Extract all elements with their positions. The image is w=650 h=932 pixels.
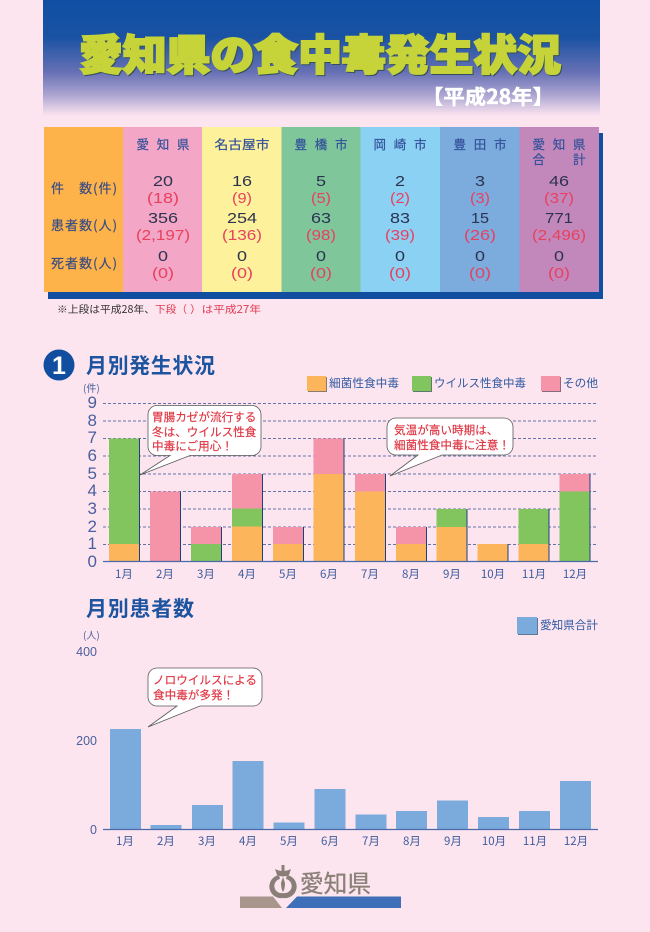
section number badge — [44, 350, 74, 380]
y axis labels: 3 — [88, 499, 97, 518]
table values: 63 — [311, 210, 331, 227]
table values: (3) — [470, 190, 490, 207]
month labels: 8月 — [402, 566, 420, 582]
month labels: 3月 — [198, 833, 216, 849]
title: 愛知県の食中毒発生状況 — [79, 22, 561, 83]
callout: norovirus: 食中毒が多発！ — [153, 687, 234, 703]
y axis labels: 0 — [90, 823, 97, 837]
header banner — [43, 0, 600, 116]
legend: outbreak types: その他 — [563, 375, 598, 391]
month labels: 10月 — [481, 566, 505, 582]
logo band — [240, 896, 401, 908]
month labels: 10月 — [482, 833, 506, 849]
column headers — [136, 134, 586, 168]
month labels: 7月 — [362, 833, 380, 849]
month labels: 2月 — [156, 566, 174, 582]
callout: winter stomach flu: 中毒にご用心！ — [152, 438, 233, 454]
table values: (5) — [311, 190, 331, 207]
table values: (2,197) — [136, 227, 190, 244]
legend: outbreak types — [307, 375, 598, 392]
table values: (0) — [231, 265, 253, 282]
row labels — [51, 178, 117, 272]
table values: 356 — [148, 210, 178, 227]
y axis labels: 2 — [88, 517, 97, 536]
table values: (136) — [222, 227, 262, 244]
table values: (98) — [306, 227, 336, 244]
month labels: 4月 — [238, 566, 256, 582]
y axis unit: (人) — [83, 627, 100, 642]
table values: (39) — [385, 227, 415, 244]
table footnote: ）は平成27年 — [190, 301, 261, 316]
icon: prefecture emblem — [269, 865, 297, 903]
month labels: 11月 — [523, 833, 547, 849]
table values: (26) — [464, 227, 496, 244]
month labels: 3月 — [197, 566, 215, 582]
callout: norovirus — [148, 668, 262, 727]
section heading: monthly outbreaks: 月別発生状況 — [86, 350, 215, 380]
table values: 5 — [316, 173, 326, 190]
y axis unit: (件) — [83, 380, 100, 395]
table values: 46 — [549, 173, 569, 190]
month labels: 6月 — [320, 566, 338, 582]
section number badge: 1 — [52, 352, 66, 380]
legend: outbreak types: 細菌性食中毒 — [329, 375, 399, 391]
column headers: 名古屋市 — [214, 134, 270, 153]
row labels: 件 数(件) — [51, 178, 117, 197]
month labels: 11月 — [522, 566, 546, 582]
table values: (0) — [310, 265, 332, 282]
month labels: 8月 — [403, 833, 421, 849]
table values: 16 — [232, 173, 252, 190]
table values: (9) — [232, 190, 252, 207]
summary table — [44, 127, 603, 299]
table values: 3 — [475, 173, 485, 190]
table values: (2) — [390, 190, 410, 207]
table values: 0 — [475, 248, 485, 265]
row labels: 患者数(人) — [51, 215, 117, 234]
table values — [136, 173, 586, 282]
table values: 83 — [390, 210, 410, 227]
footer logo: Aichi Prefecture — [240, 864, 401, 908]
month labels: 7月 — [361, 566, 379, 582]
callout: norovirus: ノロウイルスによる — [153, 672, 257, 688]
callout: hot season: 気温が高い時期は、 — [394, 422, 498, 438]
section heading: monthly patients: 月別患者数 — [86, 593, 194, 623]
table footnote: ※上段は平成28年、 — [57, 301, 155, 316]
callout: winter stomach flu — [140, 406, 261, 475]
bars — [110, 729, 591, 829]
row labels: 死者数(人) — [51, 253, 117, 272]
y axis labels: 9 — [88, 393, 97, 412]
y axis labels — [88, 393, 97, 571]
table values: 0 — [237, 248, 247, 265]
bar chart: monthly patients — [76, 627, 598, 849]
table values: (0) — [389, 265, 411, 282]
table values: 771 — [545, 210, 573, 227]
table values: (0) — [548, 265, 570, 282]
y axis labels: 0 — [88, 552, 97, 571]
month labels: 6月 — [321, 833, 339, 849]
legend: outbreak types: ウイルス性食中毒 — [434, 375, 526, 391]
table values: 0 — [316, 248, 326, 265]
table values: 0 — [554, 248, 564, 265]
month labels: 1月 — [115, 566, 133, 582]
y axis labels: 200 — [76, 734, 97, 748]
month labels: 9月 — [443, 566, 461, 582]
logo wordmark: 愛知県 — [300, 864, 371, 899]
x axis — [103, 560, 598, 562]
month labels: 2月 — [157, 833, 175, 849]
subtitle year: 【平成28年】 — [422, 81, 554, 110]
column headers: 愛 知 県 — [136, 134, 190, 153]
table values: 2 — [395, 173, 405, 190]
month labels: 5月 — [280, 833, 298, 849]
table footnote — [57, 301, 261, 316]
column headers: 豊 橋 市 — [294, 134, 348, 153]
table values: (0) — [469, 265, 491, 282]
callout: winter stomach flu: 胃腸カゼが流行する — [152, 409, 256, 425]
month labels: 1月 — [116, 833, 134, 849]
table values: 0 — [158, 248, 168, 265]
month labels — [115, 566, 587, 582]
y axis labels: 7 — [88, 428, 97, 447]
callout: hot season — [387, 418, 513, 476]
legend: prefecture total — [517, 617, 598, 635]
month labels — [116, 833, 588, 849]
y axis labels: 4 — [88, 481, 97, 500]
y axis labels: 400 — [76, 645, 97, 659]
table values: (0) — [152, 265, 174, 282]
column headers: 豊 田 市 — [454, 134, 506, 153]
y axis labels: 5 — [88, 464, 97, 483]
y axis labels — [76, 645, 97, 837]
stacked bar chart: monthly outbreaks — [83, 380, 598, 582]
legend: prefecture total: 愛知県合計 — [540, 617, 598, 633]
month labels: 5月 — [279, 566, 297, 582]
bars — [109, 438, 590, 561]
gridlines — [103, 404, 598, 544]
table footnote: 下段（ — [155, 301, 187, 316]
table values: 254 — [227, 210, 257, 227]
column headers: 合 計 — [532, 149, 586, 168]
column headers: 愛 知 県 — [532, 134, 586, 153]
month labels: 12月 — [564, 833, 588, 849]
month labels: 9月 — [444, 833, 462, 849]
table values: 0 — [395, 248, 405, 265]
table values: 20 — [153, 173, 173, 190]
table values: (2,496) — [532, 227, 586, 244]
x axis — [103, 828, 598, 830]
table values: 15 — [471, 210, 489, 227]
table values: (37) — [544, 190, 574, 207]
y axis labels: 6 — [88, 446, 97, 465]
y axis labels: 8 — [88, 411, 97, 430]
callout: winter stomach flu: 冬は、ウイルス性食 — [152, 424, 257, 440]
month labels: 4月 — [239, 833, 257, 849]
table values: (18) — [147, 190, 179, 207]
column headers: 岡 崎 市 — [374, 134, 426, 153]
y axis labels: 1 — [88, 534, 97, 553]
callout: hot season: 細菌性食中毒に注意！ — [394, 437, 510, 453]
month labels: 12月 — [563, 566, 587, 582]
